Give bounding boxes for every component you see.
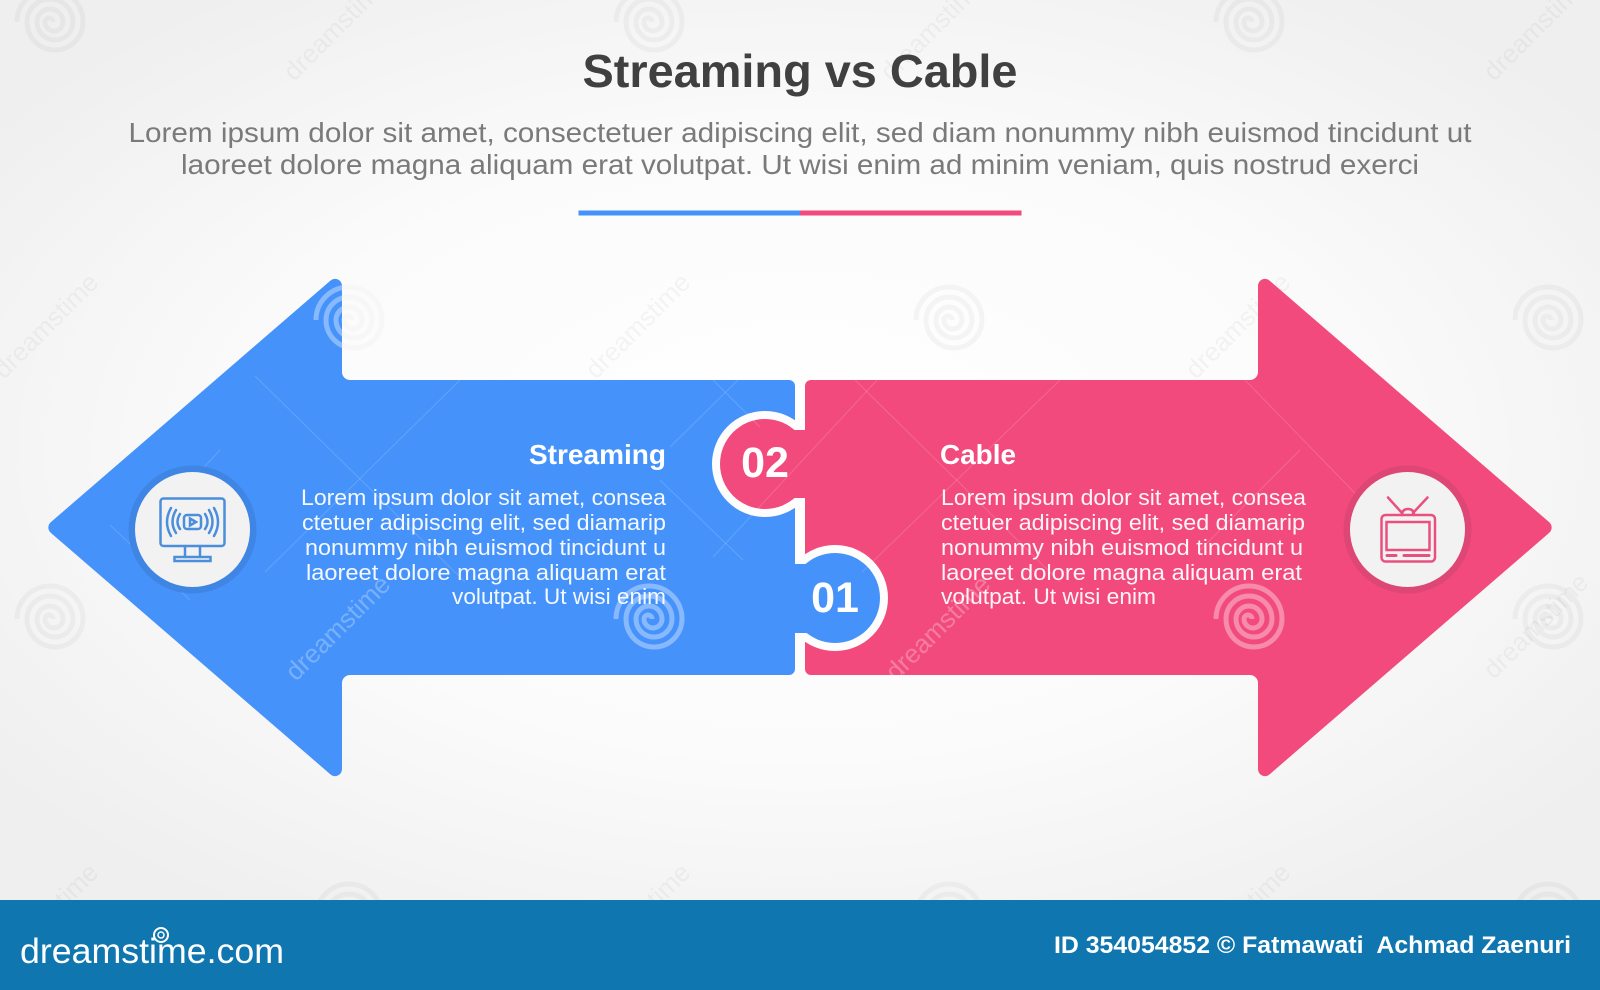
watermark over arrows: dreamstime bbox=[879, 569, 996, 686]
watermark on background: dreamstime bbox=[1179, 857, 1296, 974]
watermark on background: dreamstime bbox=[1179, 267, 1296, 384]
watermark over arrows bbox=[110, 287, 1420, 686]
watermark on background: dreamstime bbox=[579, 857, 696, 974]
divider bbox=[578, 210, 1022, 216]
puzzle tab: 01: 01 bbox=[811, 574, 859, 622]
footer banner bbox=[0, 900, 1600, 990]
text block: cable: volutpat. Ut wisi enim bbox=[941, 584, 1156, 609]
text block: streaming: ctetuer adipiscing elit, sed diamarip bbox=[302, 510, 666, 535]
text block: streaming bbox=[301, 485, 667, 609]
text block: cable: nonummy nibh euismod tincidunt u bbox=[941, 535, 1303, 560]
panel: streaming arrow bbox=[48, 279, 795, 776]
icon: streaming monitor bbox=[128, 466, 256, 594]
text block: streaming: volutpat. Ut wisi enim bbox=[452, 584, 666, 609]
subtitle text: Lorem ipsum dolor sit amet, consectetuer adipiscing elit, sed diam nonummy nibh euismod tincidunt ut bbox=[128, 117, 1472, 148]
panel: cable arrow bbox=[805, 279, 1552, 776]
text block: cable: ctetuer adipiscing elit, sed diamarip bbox=[941, 510, 1305, 535]
text block: streaming: laoreet dolore magna aliquam erat bbox=[306, 560, 666, 585]
text block: streaming: nonummy nibh euismod tincidunt u bbox=[305, 535, 666, 560]
image credit: ID 354054852 © Fatmawati Achmad Zaenuri bbox=[1054, 932, 1571, 959]
icon: cable tv bbox=[1344, 466, 1472, 594]
heading: cable: Cable bbox=[940, 439, 1016, 470]
text block: streaming: Lorem ipsum dolor sit amet, consea bbox=[301, 485, 667, 510]
text block: cable bbox=[941, 485, 1307, 609]
title: Streaming vs Cable bbox=[582, 45, 1018, 97]
text block: cable: laoreet dolore magna aliquam erat bbox=[941, 560, 1302, 585]
watermark over arrows: dreamstime bbox=[279, 569, 396, 686]
puzzle tab: 02 bbox=[712, 411, 805, 517]
watermark on background: dreamstime bbox=[1477, 567, 1594, 684]
subtitle text: laoreet dolore magna aliquam erat volutpat. Ut wisi enim ad minim veniam, quis nostrud exerci bbox=[181, 149, 1419, 180]
watermark on background: dreamstime bbox=[579, 267, 696, 384]
puzzle tab: 02: 02 bbox=[741, 439, 789, 487]
heading: streaming: Streaming bbox=[529, 439, 666, 470]
subtitle text bbox=[128, 117, 1472, 180]
puzzle tab: 01 bbox=[795, 545, 888, 651]
logo: dreamstime.com bbox=[20, 932, 284, 971]
text block: cable: Lorem ipsum dolor sit amet, consea bbox=[941, 485, 1307, 510]
